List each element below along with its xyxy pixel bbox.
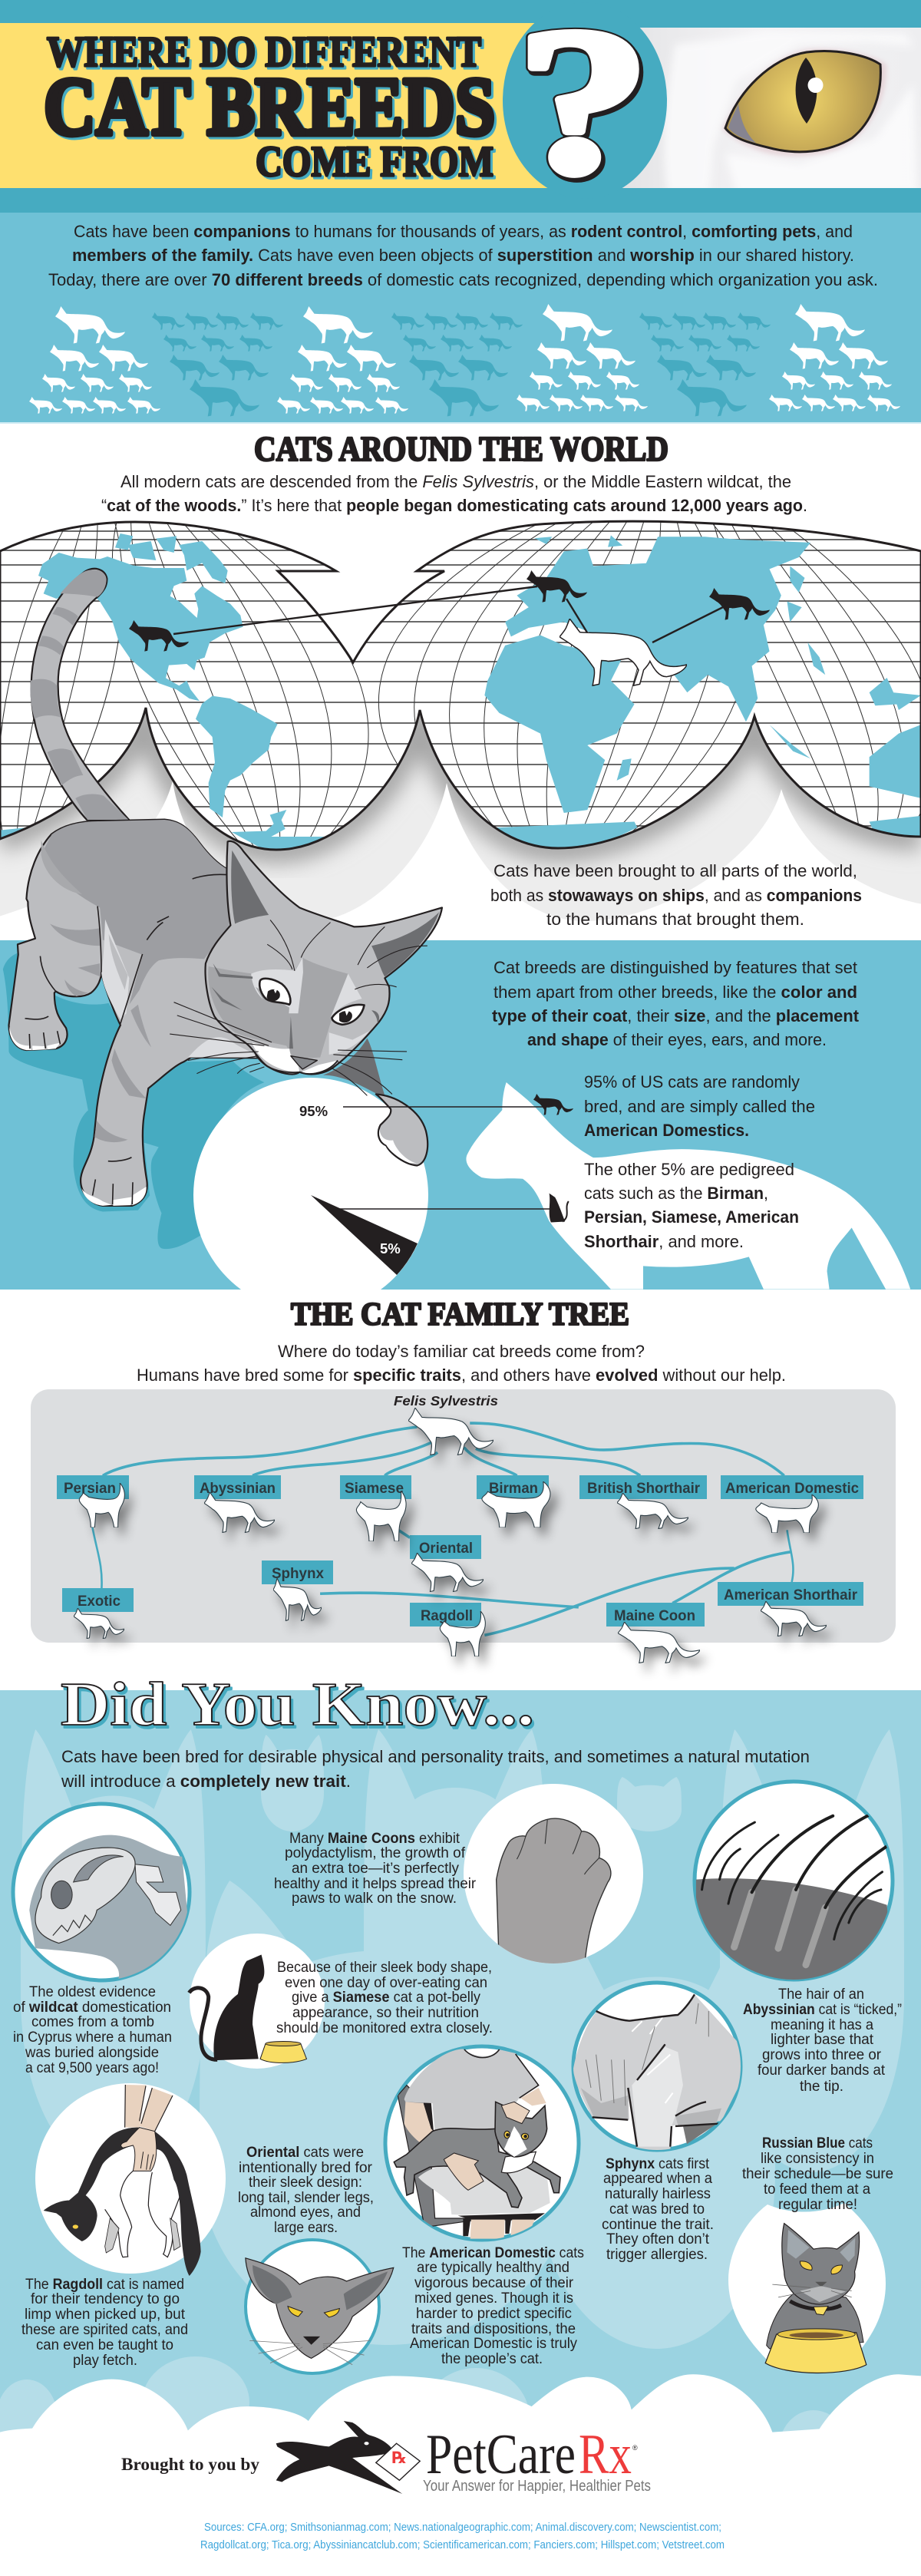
5% text: Shorthair, and more. (584, 1232, 744, 1251)
teal oval behind question mark (503, 2, 667, 199)
black cat: asia (709, 588, 770, 620)
eye (722, 49, 886, 157)
breed labels: Oriental (419, 1541, 473, 1557)
95% text (584, 1072, 815, 1140)
5% text: Persian, Siamese, American (584, 1207, 799, 1227)
sources (200, 2521, 725, 2551)
oriental text (238, 2145, 374, 2236)
oriental text: intentionally bred for (239, 2160, 373, 2176)
ragdoll text: these are spirited cats, and (21, 2322, 188, 2338)
intro text: members of the family. Cats have even been objects of superstition and worship in our shared history. (72, 246, 854, 265)
sphynx text: Sphynx cats first (606, 2156, 710, 2172)
panel: did you know background (0, 1690, 921, 2576)
body and legs (8, 820, 264, 1206)
right paw (376, 1094, 427, 1165)
circle: skull (13, 1804, 194, 1981)
sphynx text: continue the trait. (602, 2217, 714, 2233)
logo: petcarerx wordmark: ® (632, 2444, 638, 2452)
5% text: The other 5% are pedigreed (584, 1160, 794, 1179)
maine coon text: healthy and it helps spread their (274, 1876, 477, 1892)
american domestic text: the people’s cat. (441, 2351, 543, 2367)
sphynx text: trigger allergies. (606, 2247, 708, 2263)
breed labels: Exotic (78, 1593, 120, 1610)
title: CAT BREEDS (44, 61, 495, 153)
maine coon text: paws to walk on the snow. (292, 1891, 457, 1907)
russian blue text: Russian Blue cats (762, 2135, 873, 2152)
map connector lines (173, 586, 723, 642)
breeds text: them apart from other breeds, like the color and (494, 983, 857, 1002)
sphynx text (602, 2156, 714, 2263)
breed labels: British Shorthair (587, 1481, 701, 1497)
logo: petcarerx wordmark (423, 2423, 651, 2495)
text: brought to all parts: both as stowaways on ships, and as companions (490, 886, 862, 905)
wildcat text: was buried alongside (25, 2045, 159, 2061)
oriental text: long tail, slender legs, (238, 2190, 374, 2206)
siamese text: Because of their sleek body shape, (277, 1960, 492, 1976)
breed labels: American Domestic (725, 1481, 859, 1497)
abyssinian text: meaning it has a (771, 2017, 873, 2033)
head (206, 841, 442, 1074)
breeds text: type of their coat, their size, and the placement (492, 1006, 860, 1025)
ragdoll text (21, 2277, 188, 2369)
maine coon text: an extra toe—it’s perfectly (292, 1861, 459, 1877)
bottom clouds (0, 2374, 921, 2576)
logo: running dog: ℞ (392, 2449, 407, 2467)
abyssinian text (743, 1986, 902, 2095)
wildcat text: The oldest evidence (29, 1984, 156, 2000)
world text (101, 472, 807, 515)
abyssinian text: the tip. (800, 2079, 843, 2095)
dyk intro text: Cats have been bred for desirable physical and personality traits, and sometimes a natural mutation (61, 1747, 810, 1766)
95% text: bred, and are simply called the (584, 1097, 815, 1116)
circle: ragdoll (35, 2083, 226, 2276)
breed labels: Siamese (345, 1481, 404, 1497)
heading: did you know: Did You Know... (61, 1671, 534, 1739)
oriental text: Oriental cats were (246, 2145, 364, 2161)
ragdoll text: can even be taught to (36, 2337, 173, 2353)
ragdoll text: for their tendency to go (31, 2291, 180, 2307)
whiskers (170, 920, 427, 1095)
wildcat text (13, 1984, 172, 2076)
logo: running dog (276, 2421, 420, 2494)
5% text (584, 1160, 799, 1251)
icon: sitting black cat 5% (550, 1194, 569, 1223)
sources: Ragdollcat.org; Tica.org; Abyssiniancatclub.com; Scientificamerican.com; Fanciers.com; Hillspet.com; Vetstreet.com (200, 2538, 725, 2551)
logo: petcarerx wordmark: Rx (579, 2423, 632, 2486)
sphynx text: naturally hairless (605, 2186, 711, 2202)
ragdoll text: play fetch. (73, 2353, 137, 2369)
abyssinian text: four darker bands at (758, 2062, 886, 2079)
family tree text: Humans have bred some for specific traits, and others have evolved without our help. (137, 1366, 786, 1385)
wildcat text: of wildcat domestication (13, 2000, 171, 2016)
circle: paw (464, 1784, 643, 1969)
title (44, 28, 495, 186)
sphynx text: appeared when a (603, 2171, 712, 2187)
american domestic text: are typically healthy and (417, 2260, 569, 2276)
world text: “cat of the woods.” It’s here that people began domesticating cats around 12,000 years ago. (101, 496, 807, 515)
american domestic text: vigorous because of their (414, 2275, 574, 2291)
text: brought to all parts (490, 861, 862, 929)
text: brought to all parts: Cats have been brought to all parts of the world, (494, 861, 857, 880)
family tree panel (31, 1389, 896, 1663)
abyssinian text: The hair of an (778, 1986, 864, 2003)
russian blue text: to feed them at a (764, 2181, 870, 2198)
siamese text: give a Siamese cat a pot-belly (292, 1990, 480, 2006)
breed labels: Abyssinian (200, 1481, 276, 1497)
siamese text (276, 1960, 493, 2036)
american domestic text: harder to predict specific (416, 2306, 572, 2322)
photo: cat eye close-up (622, 28, 921, 188)
ragdoll text: The Ragdoll cat is named (25, 2277, 184, 2293)
map shadow lobes (0, 708, 921, 923)
cat shadow (3, 953, 264, 1249)
circle: black cat with bowl (189, 1934, 325, 2069)
continents: americas (0, 533, 330, 850)
ghost cat background pattern (0, 1729, 904, 2487)
logo: petcarerx wordmark: PetCare (426, 2423, 576, 2486)
intro text: Cats have been companions to humans for thousands of years, as rodent control, comforting pets, and (74, 222, 853, 241)
header band (0, 0, 921, 213)
maine coon text: polydactylism, the growth of (285, 1845, 466, 1861)
pie chart: 95% (299, 1103, 328, 1119)
bowl (260, 2044, 306, 2062)
russian blue text: their schedule—be sure (742, 2166, 893, 2182)
oriental text: almond eyes, and (250, 2204, 361, 2221)
american domestic text: American Domestic is truly (410, 2336, 577, 2352)
siamese text: appearance, so their nutrition (292, 2005, 479, 2021)
siamese text: should be monitored extra closely. (276, 2020, 493, 2036)
white cat: middle east origin (560, 619, 687, 685)
95% text: American Domestics. (584, 1121, 749, 1140)
heading: family tree: THE CAT FAMILY TREE (291, 1297, 629, 1333)
intro text (48, 222, 878, 289)
intro text: Today, there are over 70 different breeds of domestic cats recognized, depending which organization you ask. (48, 270, 878, 289)
continents: old world (484, 535, 921, 857)
nose and mouth (291, 1056, 317, 1069)
russian blue text: like consistency in (761, 2151, 874, 2167)
american domestic text: The American Domestic cats (402, 2245, 584, 2261)
title: COME FROM (256, 138, 494, 186)
circle: sphynx (573, 1983, 744, 2152)
abyssinian text: grows into three or (762, 2047, 882, 2063)
breed labels: Sphynx (272, 1566, 324, 1582)
circle: oriental cat (246, 2240, 394, 2373)
sources: Sources: CFA.org; Smithsonianmag.com; News.nationalgeographic.com; Animal.discovery.com; Newscientist.com; (204, 2521, 721, 2534)
russian blue text (742, 2135, 893, 2213)
icon: black cat 95% (533, 1094, 573, 1115)
maine coon text (274, 1831, 477, 1907)
circle: american domestic on lap (385, 2046, 579, 2240)
siamese text: even one day of over-eating can (285, 1975, 487, 1991)
pie chart (193, 1078, 428, 1290)
logo: petcarerx wordmark: Your Answer for Happier, Healthier Pets (423, 2478, 651, 2495)
panel: breeds teal (0, 940, 921, 1290)
breeds text: Cat breeds are distinguished by features that set (494, 958, 857, 977)
wildcat text: in Cyprus where a human (13, 2029, 172, 2046)
arm shadow (323, 1039, 385, 1095)
circle: russian blue cat (728, 2203, 886, 2373)
family tree text (137, 1342, 786, 1385)
connecting lines (92, 1423, 793, 1635)
dyk intro text (61, 1747, 810, 1791)
eyes (259, 979, 290, 1005)
map grid (2, 522, 919, 846)
5% text: cats such as the Birman, (584, 1184, 768, 1203)
black cat: north america (129, 620, 189, 652)
text: brought to all parts: to the humans that brought them. (546, 910, 804, 929)
breed labels: Persian (64, 1481, 116, 1497)
american domestic text: traits and dispositions, the (411, 2321, 576, 2337)
breed labels: Birman (489, 1481, 538, 1497)
felis sylvestris label: Felis Sylvestris (394, 1393, 498, 1409)
white cat silhouette (466, 1082, 910, 1290)
breed labels: American Shorthair (724, 1587, 858, 1603)
pie leader lines (338, 1107, 550, 1209)
cat silhouette pattern (29, 304, 900, 417)
family tree text: Where do today’s familiar cat breeds come from? (278, 1342, 645, 1361)
wildcat text: comes from a tomb (31, 2014, 154, 2030)
breed labels (57, 1475, 863, 1627)
pie slice 5% (311, 1195, 418, 1275)
maine coon text: Many Maine Coons exhibit (289, 1831, 460, 1847)
sphynx text: cat was bred to (609, 2201, 705, 2218)
oriental text: their sleek design: (249, 2175, 362, 2191)
panel: intro (0, 213, 921, 422)
ragdoll text: limp when picked up, but (25, 2307, 186, 2323)
title banner (0, 23, 560, 188)
breed labels: Ragdoll (421, 1608, 473, 1624)
95% text: 95% of US cats are randomly (584, 1072, 800, 1091)
american domestic text (402, 2245, 584, 2367)
abyssinian text: lighter base that (771, 2032, 874, 2048)
big grey tabby cat (8, 569, 442, 1206)
heading: cats around the world: CATS AROUND THE WORLD (254, 430, 668, 468)
world map (0, 520, 921, 850)
sponsor line: Brought to you by (121, 2455, 259, 2474)
pie chart: 5% (380, 1240, 401, 1257)
breed labels: Maine Coon (614, 1608, 695, 1624)
world text: All modern cats are descended from the Felis Sylvestris, or the Middle Eastern wildcat, the (120, 472, 791, 491)
american domestic text: mixed genes. Though it is (414, 2290, 573, 2307)
wildcat text: a cat 9,500 years ago! (25, 2060, 159, 2076)
russian blue text: regular time! (778, 2197, 857, 2213)
black cat: europe (527, 570, 587, 603)
oriental text: large ears. (274, 2220, 338, 2236)
dyk intro text: will introduce a completely new trait. (61, 1772, 351, 1791)
abyssinian text: Abyssinian cat is “ticked,” (743, 2002, 902, 2018)
title: WHERE DO DIFFERENT (47, 28, 481, 76)
sphynx text: They often don’t (606, 2231, 710, 2247)
tail (30, 569, 129, 820)
breeds text: and shape of their eyes, ears, and more. (527, 1030, 827, 1049)
breed cat silhouettes (74, 1408, 827, 1663)
circle: ticked hair (695, 1782, 903, 1981)
breeds text (492, 958, 860, 1049)
